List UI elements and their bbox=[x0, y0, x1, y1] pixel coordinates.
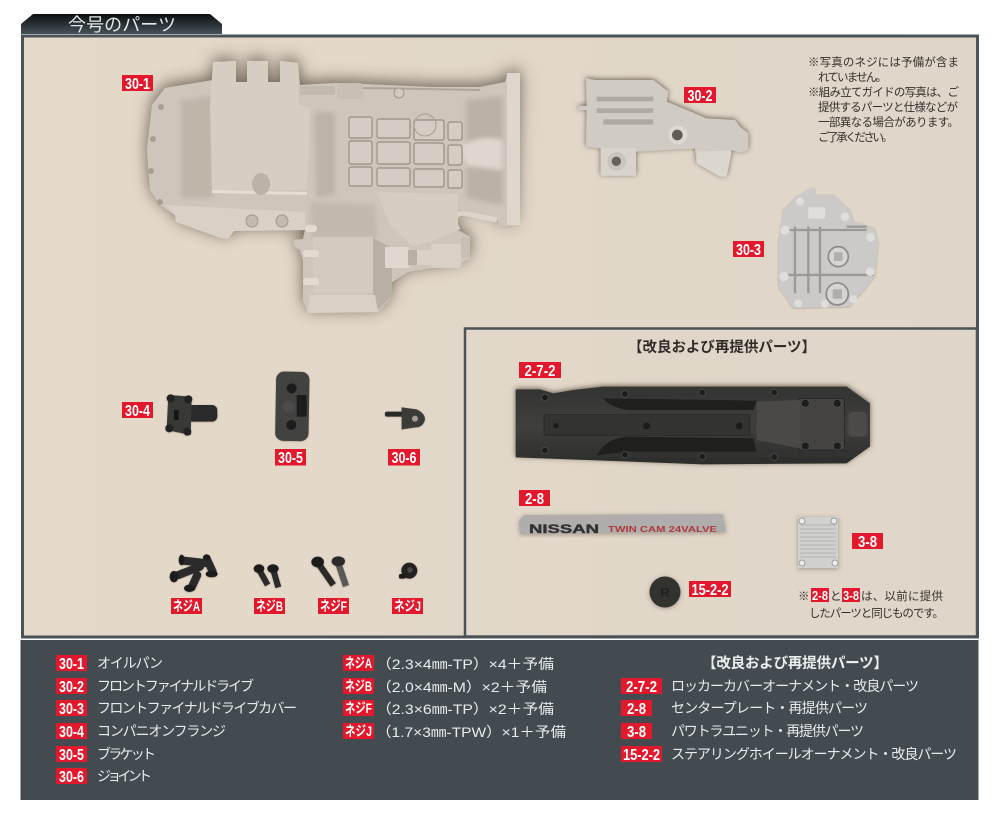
heading: 改良および再提供パーツ: 【改良および再提供パーツ】 bbox=[628, 338, 816, 356]
drain boss bbox=[252, 173, 270, 195]
note: photo disclaimers: ※組み立てガイドの写真は、ご bbox=[808, 85, 960, 99]
raised sump box bbox=[210, 61, 310, 190]
legend column: main parts: フロントファイナルドライブ bbox=[97, 678, 254, 694]
housing side shade bbox=[373, 238, 392, 310]
legend column: main parts: フロントファイナルドライブカバー bbox=[97, 700, 297, 716]
part photo: 30-5 bracket bbox=[275, 371, 310, 441]
legend column: main parts: 30-1 bbox=[59, 656, 84, 673]
legend column: screws: ネジJ bbox=[345, 723, 372, 739]
legend column: improved and resupplied parts: ロッカーカバーオーナメント・改良パーツ bbox=[671, 678, 919, 694]
part photo: 15-2-2 steering wheel ornament bbox=[650, 576, 680, 608]
label: 30-4: 30-4 bbox=[125, 403, 150, 420]
part photo: screws A bbox=[170, 554, 218, 592]
legend column: main parts: 30-4 bbox=[59, 724, 84, 741]
part photo: 30-4 companion flange bbox=[165, 394, 217, 436]
label: ネジA: ネジA bbox=[173, 598, 200, 614]
note: previously supplied parts: ※ bbox=[798, 591, 810, 603]
lower flange with bolts bbox=[165, 205, 305, 239]
label: 30-6: 30-6 bbox=[392, 450, 417, 467]
legend column: main parts: 30-3 bbox=[59, 701, 84, 718]
rear flange bbox=[507, 73, 520, 225]
legend column: improved and resupplied parts: ステアリングホイールオーナメント・改良パーツ bbox=[671, 746, 957, 762]
legend column: main parts: ジョイント bbox=[97, 768, 152, 784]
note: photo disclaimers: ご了承ください。 bbox=[818, 130, 893, 144]
lower web bbox=[377, 192, 458, 246]
box lower highlight bbox=[212, 190, 307, 195]
legend column: improved and resupplied parts: 【改良および再提供パーツ】 bbox=[702, 654, 888, 672]
legend column: main parts: ブラケット bbox=[97, 746, 156, 762]
legend column: screws: ネジB bbox=[345, 678, 372, 694]
legend column: screws: （1.7×3㎜-TPW）×1＋予備 bbox=[376, 724, 566, 740]
legend column: improved and resupplied parts: 2-7-2 bbox=[626, 679, 657, 696]
legend column: main parts: コンパニオンフランジ bbox=[97, 723, 226, 739]
legend panel bbox=[20, 640, 978, 800]
label: 30-5: 30-5 bbox=[278, 450, 303, 467]
note: previously supplied parts: 3-8 bbox=[843, 588, 859, 603]
section tab: 今号のパーツ bbox=[21, 14, 222, 35]
label: 30-1: 30-1 bbox=[125, 76, 150, 93]
part photo: screws B bbox=[254, 564, 279, 587]
legend column: improved and resupplied parts: 2-8 bbox=[627, 701, 646, 718]
legend column: screws: ネジA bbox=[345, 655, 372, 671]
label: ネジJ: ネジJ bbox=[394, 598, 421, 614]
label: ネジB: ネジB bbox=[256, 598, 283, 614]
legend column: screws bbox=[343, 655, 566, 740]
legend column: screws: （2.3×4㎜-TP）×4＋予備 bbox=[376, 656, 554, 672]
tube loop bbox=[455, 213, 497, 230]
note: previously supplied parts: 2-8 bbox=[812, 588, 828, 603]
legend column: screws: （2.3×6㎜-TP）×2＋予備 bbox=[376, 701, 554, 717]
shaded region at rear bbox=[466, 96, 503, 205]
note: previously supplied parts: は、以前に提供 bbox=[861, 589, 944, 603]
part photo: screws F bbox=[311, 556, 346, 586]
legend column: screws: ネジF bbox=[345, 700, 372, 716]
part photo: 2-8 center plate: NISSAN bbox=[529, 522, 599, 536]
round casting mark bbox=[414, 114, 436, 136]
part photo: 2-8 center plate: TWIN CAM 24VALVE bbox=[608, 524, 717, 534]
flange bolts bbox=[246, 215, 288, 227]
housing shaded top bbox=[310, 202, 378, 238]
note: previously supplied parts bbox=[798, 588, 944, 620]
legend column: main parts: 30-6 bbox=[59, 769, 84, 786]
note: photo disclaimers: ※写真のネジには予備が含ま bbox=[808, 55, 959, 69]
sump left recess bbox=[181, 96, 213, 198]
label: 2-8: 2-8 bbox=[525, 491, 544, 508]
shaded web beside box bbox=[314, 112, 335, 198]
part photo: 15-2-2 steering wheel ornament: R bbox=[660, 585, 670, 600]
part photo: 3-8 power unit bbox=[798, 517, 838, 568]
main photo panel bbox=[22, 36, 978, 637]
label: 30-3: 30-3 bbox=[736, 242, 761, 259]
label: 30-2: 30-2 bbox=[688, 88, 713, 105]
rib ridge highlight bbox=[460, 138, 503, 170]
housing bottom lip bbox=[308, 295, 378, 313]
part photo: 2-8 center plate bbox=[519, 514, 726, 536]
legend column: main parts: オイルパン bbox=[97, 655, 163, 671]
label: 2-7-2: 2-7-2 bbox=[524, 363, 556, 380]
panel: improved and resupplied parts bbox=[465, 328, 977, 636]
label: 3-8: 3-8 bbox=[858, 534, 877, 551]
label: 15-2-2: 15-2-2 bbox=[692, 582, 729, 599]
legend column: improved and resupplied parts: センタープレート・再提供パーツ bbox=[671, 700, 868, 716]
part photo: 30-1 oil pan bbox=[147, 61, 520, 313]
legend column: screws: （2.0×4㎜-M）×2＋予備 bbox=[376, 679, 547, 695]
note: previously supplied parts: したパーツと同じものです。 bbox=[809, 607, 944, 620]
part photo: 30-6 joint bbox=[385, 407, 425, 429]
housing side lugs bbox=[303, 225, 319, 285]
label: ネジF: ネジF bbox=[320, 598, 347, 614]
note: photo disclaimers: 一部異なる場合があります。 bbox=[818, 115, 959, 129]
note: photo disclaimers bbox=[808, 55, 960, 144]
output cylinder bbox=[385, 237, 470, 268]
section tab: 今号のパーツ: 今号のパーツ bbox=[68, 15, 176, 35]
legend column: improved and resupplied parts: 15-2-2 bbox=[623, 747, 660, 764]
legend column: main parts bbox=[56, 655, 297, 786]
legend column: main parts: 30-5 bbox=[59, 747, 84, 764]
note: photo disclaimers: 提供するパーツと仕様などが bbox=[818, 100, 958, 114]
part photo: screw J bbox=[399, 563, 417, 579]
rib grid bbox=[349, 117, 462, 188]
part photo: 30-2 front final drive bbox=[578, 78, 748, 177]
part photo: 2-7-2 rocker cover ornament bbox=[516, 387, 870, 464]
legend column: improved and resupplied parts: 3-8 bbox=[627, 724, 646, 741]
legend column: main parts: 30-2 bbox=[59, 679, 84, 696]
note: photo disclaimers: れていません。 bbox=[818, 71, 887, 84]
legend column: improved and resupplied parts: パワトラユニット・再提供パーツ bbox=[671, 723, 864, 739]
legend column: improved and resupplied parts bbox=[621, 654, 957, 764]
part photo: 30-3 front final drive cover bbox=[778, 188, 878, 308]
rim bolts bbox=[148, 104, 164, 205]
note: previously supplied parts: と bbox=[830, 590, 842, 603]
top boss row bbox=[300, 83, 480, 99]
housing face bbox=[313, 237, 373, 293]
